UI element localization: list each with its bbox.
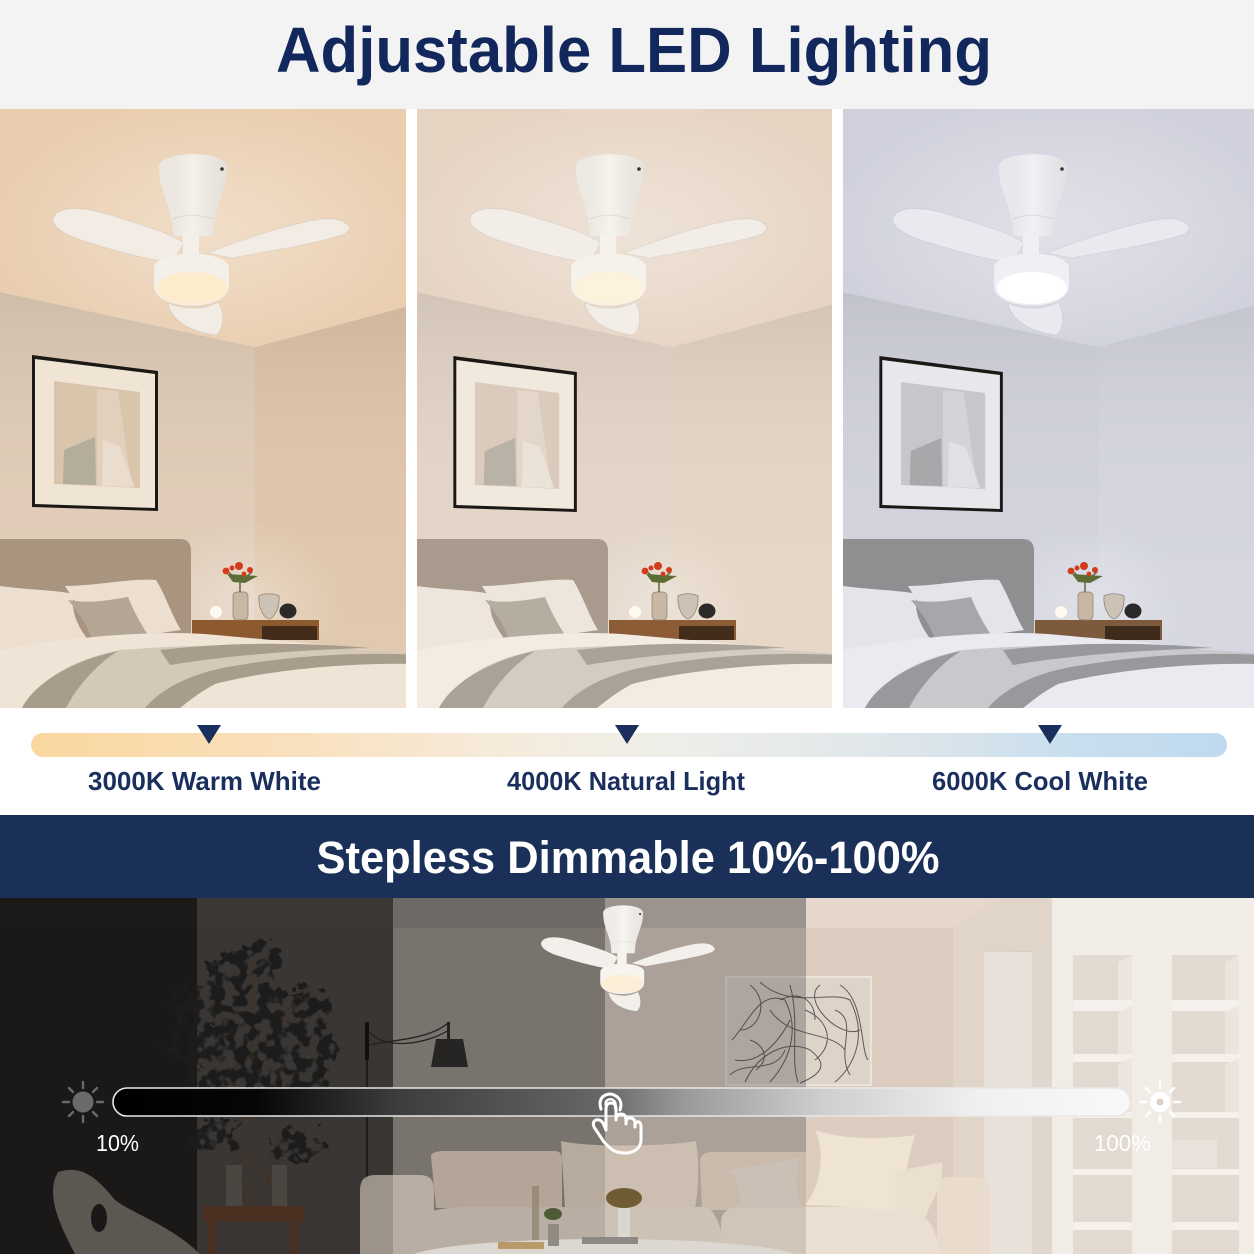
bed and nightstand: [0, 539, 420, 708]
label: 3000K Warm White: 3000K Warm White: [88, 766, 321, 796]
room walls and ceiling: [417, 109, 832, 654]
panel: dimming living room: [0, 898, 1254, 1254]
bed and nightstand: [417, 539, 837, 708]
wall art: [726, 977, 871, 1085]
dimming step overlays: [0, 898, 1052, 1254]
room walls and ceiling: [843, 109, 1254, 654]
section band: [0, 815, 1254, 898]
coffee table: [414, 1186, 795, 1254]
room walls and ceiling: [0, 109, 406, 653]
tree: [197, 938, 342, 1206]
nightstand decor: [1055, 562, 1142, 620]
panel: 4000K natural light bedroom: [417, 109, 832, 708]
wall lamp: [367, 1022, 468, 1180]
brightness slider: [113, 1088, 1130, 1116]
framed picture: [453, 356, 577, 512]
title band: [0, 0, 1254, 109]
ceiling fan: [893, 154, 1190, 335]
nightstand decor: [210, 562, 296, 620]
label: 10%: 10%: [96, 1130, 139, 1156]
framed picture: [32, 355, 158, 511]
panel: 3000K warm white bedroom: [0, 109, 406, 708]
label: 100%: 100%: [1094, 1130, 1151, 1156]
ceiling fan: [541, 905, 715, 1011]
title: Adjustable LED Lighting: [276, 14, 992, 86]
ceiling fan: [470, 154, 767, 335]
marker: 3000K: [197, 725, 221, 744]
armchair: [53, 1170, 200, 1254]
icon: dim sun: [63, 1082, 103, 1122]
bed and nightstand: [843, 539, 1254, 708]
temperature gradient bar: [31, 733, 1227, 757]
colour temperature scale: [31, 725, 1227, 796]
label: 6000K Cool White: 6000K Cool White: [932, 766, 1148, 796]
framed picture: [879, 356, 1003, 512]
bookcase: [984, 898, 1254, 1254]
sofa: [360, 1130, 990, 1254]
marker: 4000K: [615, 725, 639, 744]
icon: bright sun: [1140, 1082, 1180, 1122]
panel: 6000K cool white bedroom: [828, 95, 1254, 708]
icon: touch hand: [593, 1094, 641, 1153]
side table: [203, 1206, 304, 1254]
label: 4000K Natural Light: 4000K Natural Light: [507, 766, 745, 796]
nightstand decor: [629, 562, 716, 620]
marker: 6000K: [1038, 725, 1062, 744]
ceiling fan: [53, 154, 350, 335]
living room back wall and ceiling: [197, 898, 1052, 1254]
section heading: Stepless Dimmable 10%-100%: [316, 832, 940, 883]
